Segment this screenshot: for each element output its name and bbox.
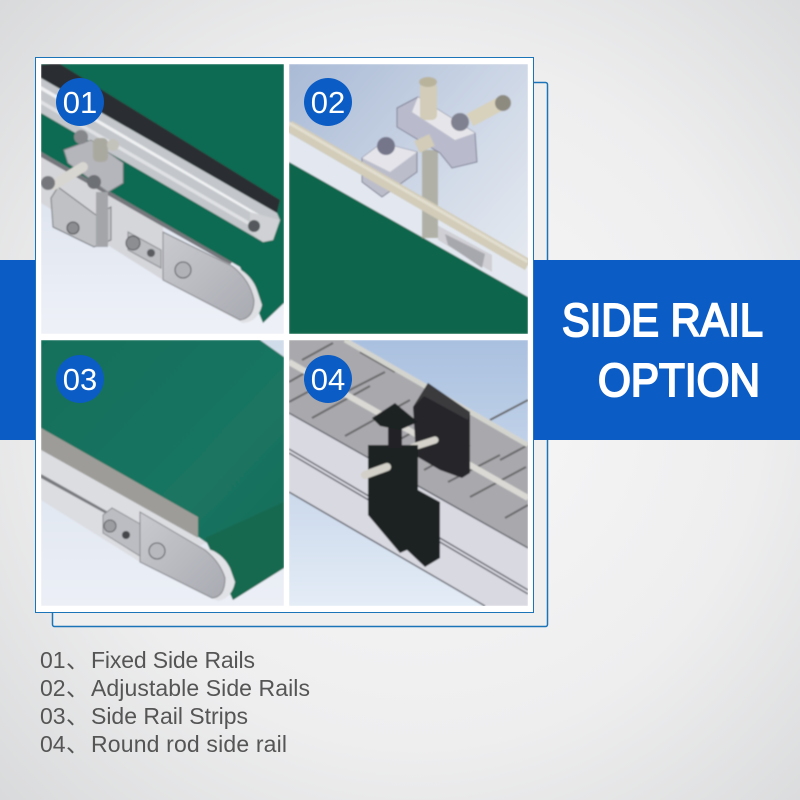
badge 04 — [304, 355, 352, 403]
title — [562, 294, 763, 406]
panel 02: adjustable side rails — [289, 64, 528, 334]
badge 04: 04 — [311, 362, 345, 397]
badge 02: 02 — [311, 85, 345, 120]
panel 01: fixed side rails — [41, 64, 284, 334]
option list — [40, 647, 310, 757]
badge 01 — [56, 78, 104, 126]
badge 03 — [56, 355, 104, 403]
option list: Side Rail Strips — [91, 703, 248, 729]
panel 04: round rod side rail — [289, 340, 528, 606]
badge 01: 01 — [63, 85, 97, 120]
title: SIDE RAIL — [562, 294, 763, 346]
panel 03: side rail strips — [41, 340, 284, 606]
option list: Adjustable Side Rails — [91, 675, 310, 701]
white photo frame — [36, 58, 534, 612]
blue title band — [0, 260, 800, 440]
option list: 、 — [66, 731, 89, 757]
option list: 03 — [40, 703, 66, 729]
option list: 、 — [66, 647, 89, 673]
badge 03: 03 — [63, 362, 97, 397]
option list: 02 — [40, 675, 66, 701]
option list: 04 — [40, 731, 66, 757]
option list: 、 — [66, 675, 89, 701]
title: OPTION — [598, 354, 760, 406]
option list: 、 — [66, 703, 89, 729]
blue band right segment over the outline — [533, 260, 800, 440]
option list: Round rod side rail — [91, 731, 287, 757]
option list: 01 — [40, 647, 66, 673]
option list: Fixed Side Rails — [91, 647, 255, 673]
badge 02 — [304, 78, 352, 126]
back outline frame — [52, 82, 548, 626]
